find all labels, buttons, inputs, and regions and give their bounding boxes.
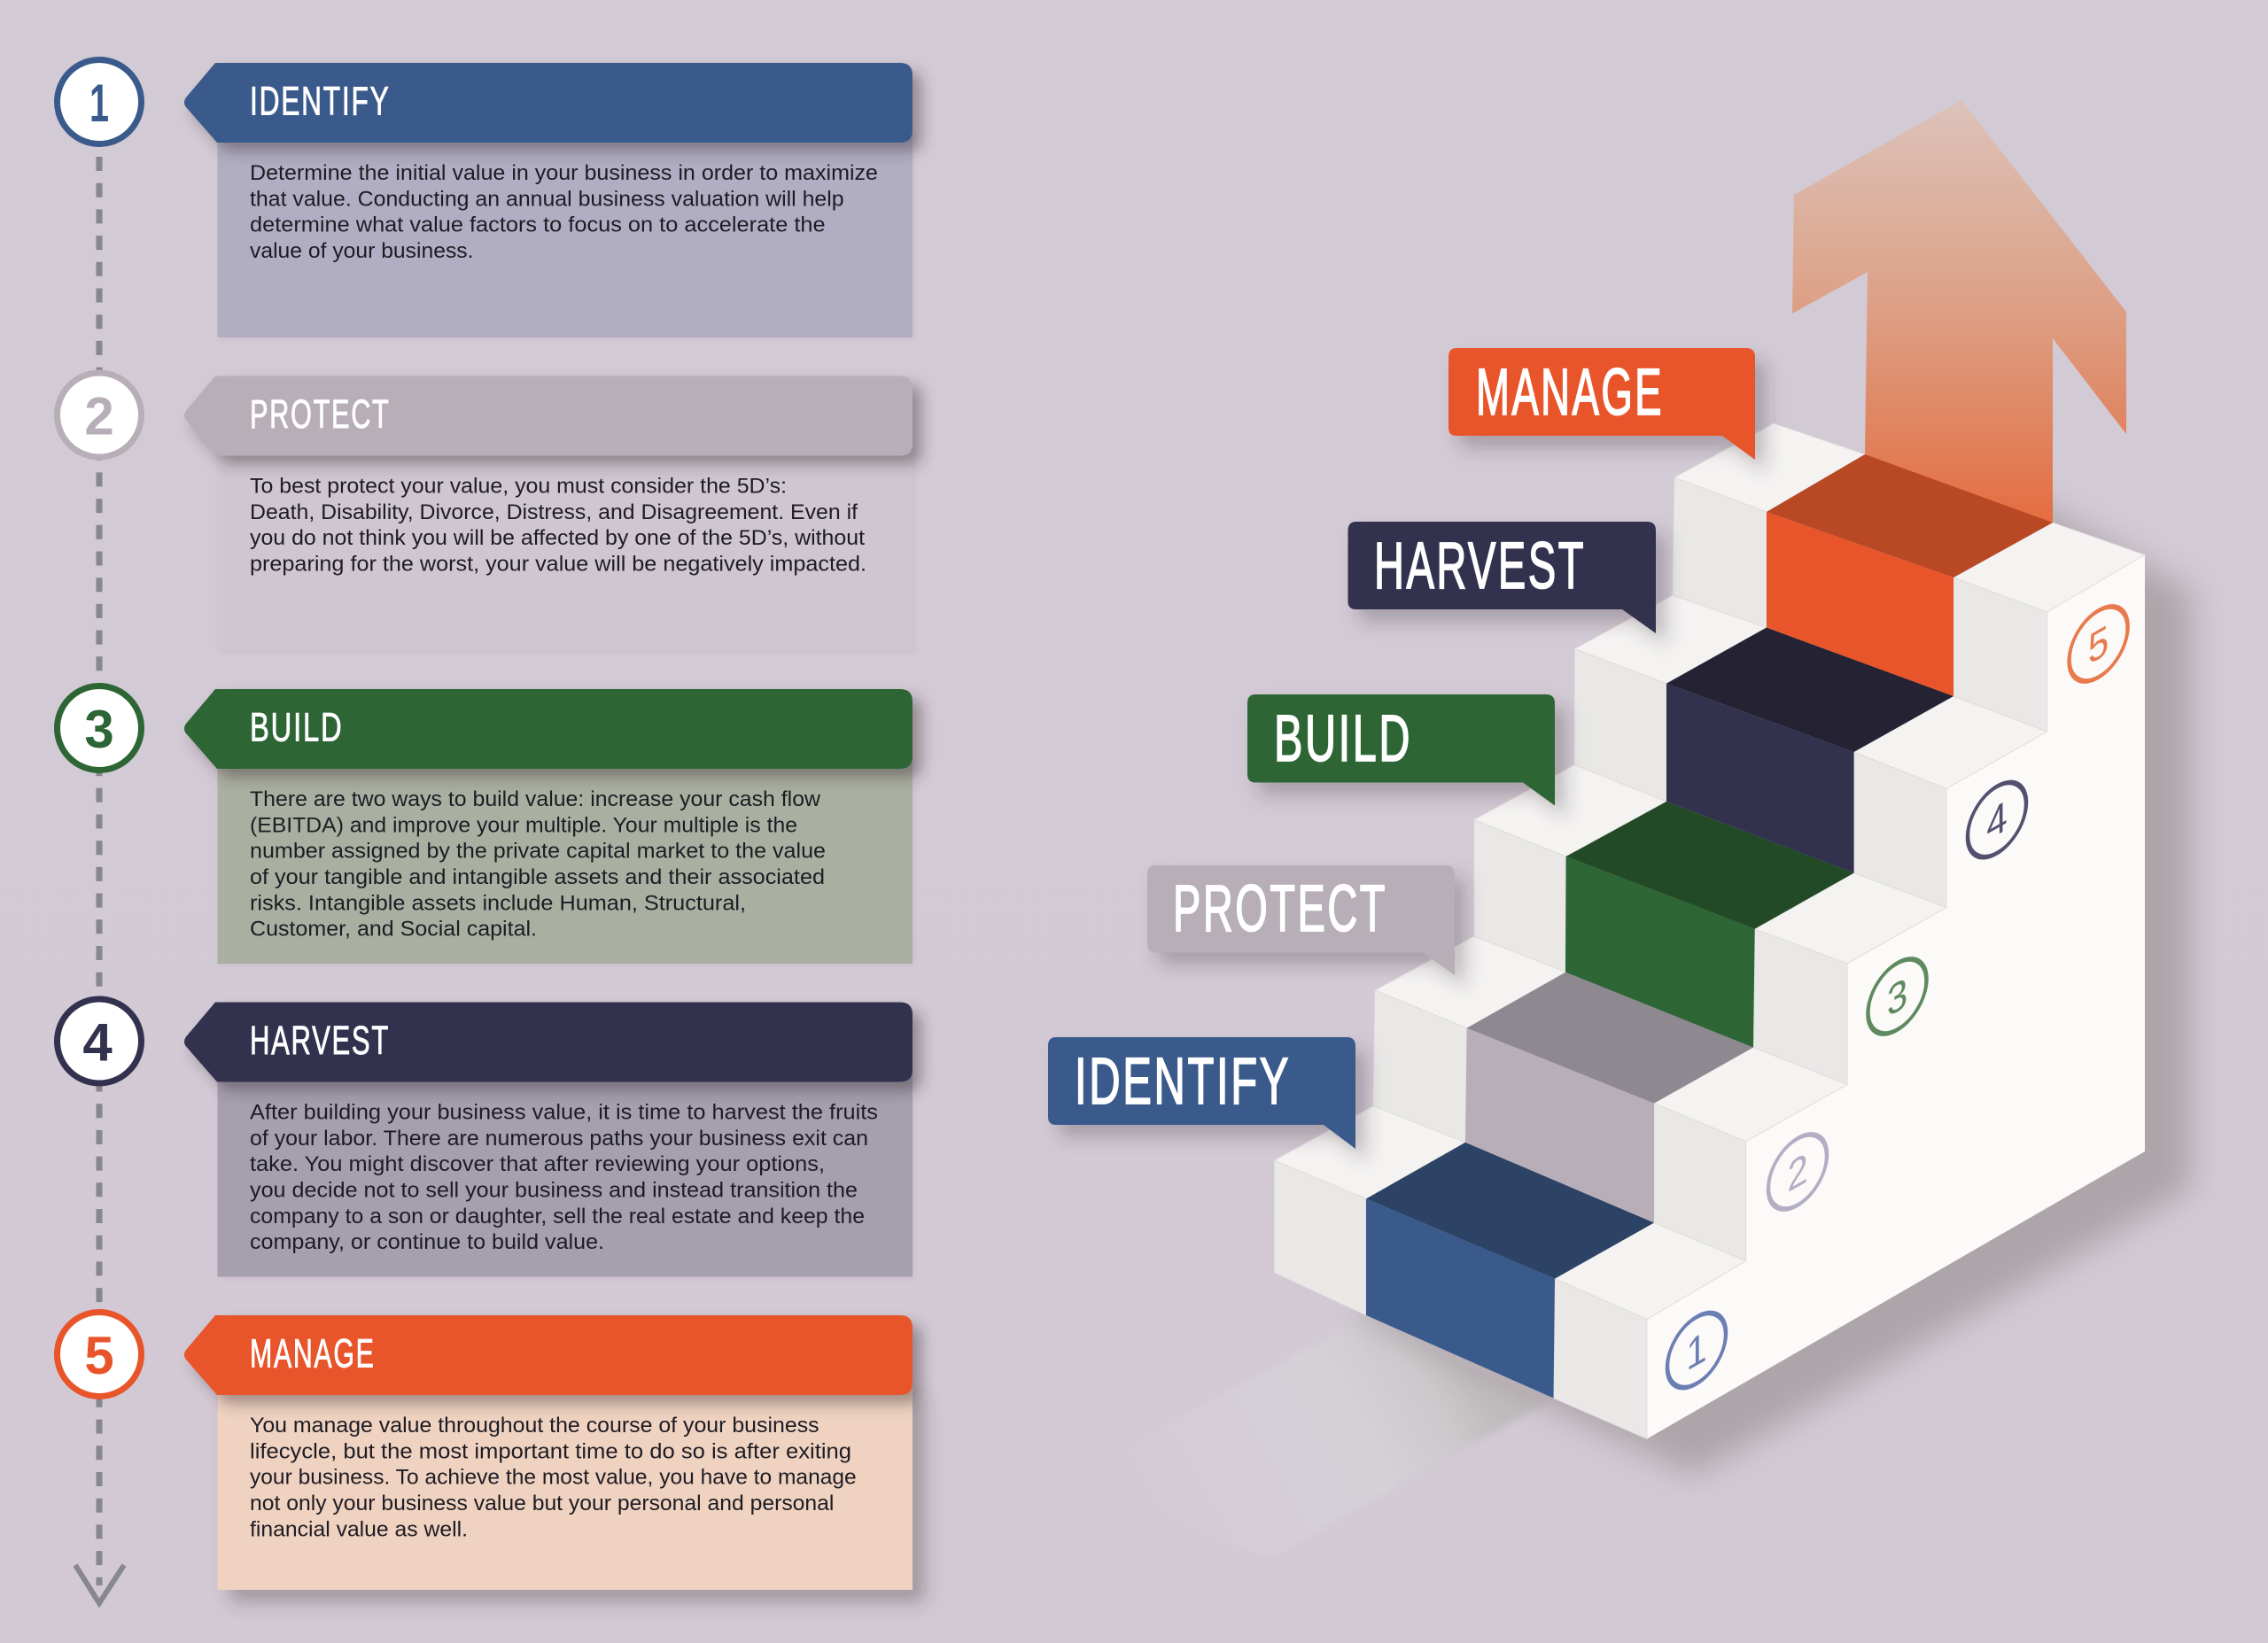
text: build body: There are two ways to build value: increase your cash flow xyxy=(250,787,820,811)
header: build xyxy=(184,689,913,769)
side number 3 xyxy=(1868,947,1926,1046)
text: harvest body: After building your business value, it is time to harvest the fruits xyxy=(250,1100,878,1125)
colored step 1: blue xyxy=(1366,1143,1654,1398)
colored step 5: orange xyxy=(1767,454,2053,696)
rising arrow xyxy=(1792,100,2126,577)
header: harvest xyxy=(184,1003,913,1082)
text: manage body: lifecycle, but the most important time to do so is after exiting xyxy=(250,1439,851,1463)
side number 5: 5 xyxy=(2088,616,2109,675)
text: harvest body: company to a son or daughter, sell the real estate and keep the xyxy=(250,1205,865,1228)
text: harvest body: take. You might discover that after reviewing your options, xyxy=(250,1152,825,1176)
callout: build: BUILD xyxy=(1274,701,1412,775)
side number 1: 1 xyxy=(1686,1321,1707,1381)
callout: harvest xyxy=(1348,522,1656,633)
callout: identify: IDENTIFY xyxy=(1075,1044,1291,1118)
header: protect: PROTECT xyxy=(250,391,390,437)
step 2: protect xyxy=(57,373,913,650)
header: harvest: HARVEST xyxy=(250,1018,390,1063)
text: harvest body xyxy=(250,1100,878,1254)
step 4: harvest xyxy=(57,999,913,1277)
text: identify body: value of your business. xyxy=(250,239,473,263)
text: manage body: your business. To achieve the most value, you have to manage xyxy=(250,1466,857,1490)
timeline: dashed line and arrowhead xyxy=(75,157,124,1603)
text: protect body: Death, Disability, Divorce, Distress, and Disagreement. Even if xyxy=(250,500,858,524)
text: harvest body: of your labor. There are numerous paths your business exit can xyxy=(250,1127,868,1151)
floor reflection xyxy=(1068,1317,1551,1559)
text: protect body xyxy=(250,475,866,576)
step 5: manage xyxy=(57,1313,913,1590)
text: build body xyxy=(250,787,826,942)
text: manage body: not only your business value but your personal and personal xyxy=(250,1492,834,1515)
side number 4 xyxy=(1968,770,2026,870)
header: manage: MANAGE xyxy=(250,1330,376,1376)
number badge 5: 5 xyxy=(84,1326,114,1385)
text: manage body: You manage value throughout the course of your business xyxy=(250,1414,819,1438)
staircase drop shadow xyxy=(1357,480,2191,1476)
text: protect body: To best protect your value, you must consider the 5D’s: xyxy=(250,475,787,498)
colored step 4: navy xyxy=(1666,627,1953,873)
callout: harvest: HARVEST xyxy=(1374,529,1586,602)
number badge 5 xyxy=(57,1313,142,1396)
header: manage xyxy=(184,1315,913,1395)
text: protect body: you do not think you will be affected by one of the 5D’s, without xyxy=(250,526,865,550)
panel: harvest description xyxy=(218,1072,913,1277)
header: build: BUILD xyxy=(250,705,344,749)
colored step 3: green xyxy=(1565,802,1854,1047)
side number 2 xyxy=(1768,1122,1827,1221)
callout: protect xyxy=(1147,865,1455,975)
header: identify: IDENTIFY xyxy=(250,78,390,124)
side number 1 xyxy=(1667,1300,1726,1400)
side number 5 xyxy=(2070,594,2128,694)
callout: build xyxy=(1247,694,1555,806)
header: identify xyxy=(184,63,913,143)
text: build body: Customer, and Social capital. xyxy=(250,918,537,942)
side number 3: 3 xyxy=(1887,968,1907,1027)
panel: identify description xyxy=(218,133,913,337)
callout: manage: MANAGE xyxy=(1476,355,1664,429)
number badge 1: 1 xyxy=(89,74,109,133)
white stair surfaces xyxy=(1274,423,2145,1438)
callout: identify xyxy=(1048,1037,1355,1149)
text: identify body: determine what value factors to focus on to accelerate the xyxy=(250,213,826,237)
text: build body: (EBITDA) and improve your multiple. Your multiple is the xyxy=(250,813,797,837)
number badge 4: 4 xyxy=(82,1013,113,1072)
panel: build description xyxy=(218,759,913,964)
text: identify body xyxy=(250,161,878,263)
number badge 2 xyxy=(57,373,142,457)
text: harvest body: company, or continue to build value. xyxy=(250,1230,604,1254)
header: protect xyxy=(184,376,913,455)
text: harvest body: you decide not to sell your business and instead transition the xyxy=(250,1178,858,1203)
step 3: build xyxy=(57,686,913,964)
number badge 2: 2 xyxy=(84,386,114,446)
text: identify body: that value. Conducting an annual business valuation will help xyxy=(250,187,844,211)
number badge 3 xyxy=(57,686,142,771)
side number 2: 2 xyxy=(1787,1143,1808,1203)
number badge 3: 3 xyxy=(84,700,114,759)
text: identify body: Determine the initial value in your business in order to maximize xyxy=(250,161,878,185)
callout: manage xyxy=(1449,348,1755,460)
staircase illustration xyxy=(1068,100,2191,1559)
panel: protect description xyxy=(218,446,913,650)
number badge 1 xyxy=(57,60,142,143)
text: build body: of your tangible and intangible assets and their associated xyxy=(250,865,825,889)
text: build body: risks. Intangible assets include Human, Structural, xyxy=(250,891,746,915)
step 1: identify xyxy=(57,60,913,337)
panel: manage description xyxy=(218,1385,913,1590)
staircase side wall xyxy=(1647,554,2145,1438)
text: manage body: financial value as well. xyxy=(250,1517,468,1541)
text: manage body xyxy=(250,1414,857,1541)
text: build body: number assigned by the private capital market to the value xyxy=(250,840,826,864)
icon: timeline arrowhead xyxy=(75,1565,124,1603)
number badge 4 xyxy=(57,999,142,1083)
side number 4: 4 xyxy=(1986,791,2008,850)
text: protect body: preparing for the worst, your value will be negatively impacted. xyxy=(250,553,866,576)
colored step 2: grey xyxy=(1465,973,1753,1222)
callout: protect: PROTECT xyxy=(1173,872,1387,945)
